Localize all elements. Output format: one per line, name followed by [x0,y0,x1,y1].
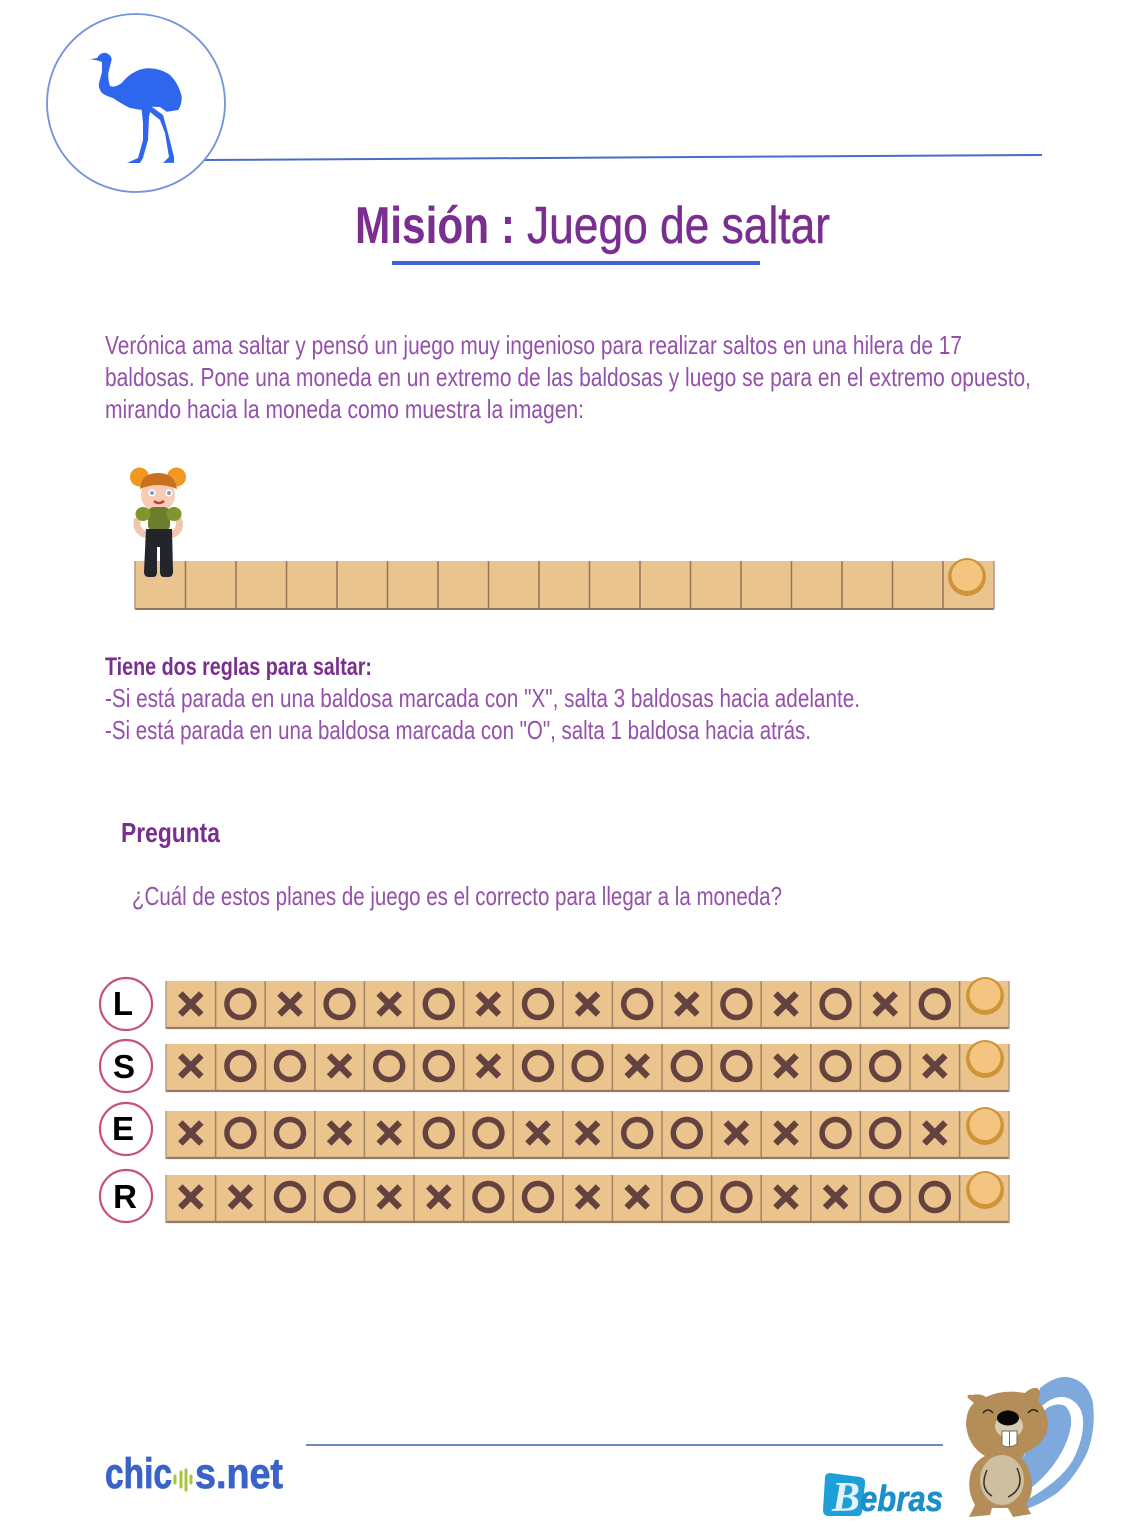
heading: question: Pregunta [121,817,220,848]
question text: ¿Cuál de estos planes de juego es el correcto para llegar a la moneda? [132,881,782,911]
option R: R [113,1178,137,1215]
icon: ostrich badge [47,14,225,192]
option L: L [113,985,133,1022]
logo: Bebras: B [831,1475,860,1521]
logo: chicos.net: chic [105,1450,172,1498]
text block: introduction [105,330,1031,424]
beaver body [966,1388,1048,1517]
header rule [205,155,1042,160]
logo: chicos.net [105,1450,283,1498]
option L [100,977,1009,1030]
text block: rules: -Si está parada en una baldosa marcada con "O", salta 1 baldosa hacia atrás. [105,715,811,745]
title: Juego de saltar [527,197,830,255]
text block: rules: -Si está parada en una baldosa marcada con "X", salta 3 baldosas hacia adelante. [105,683,860,713]
icon: beaver mascot [966,1377,1094,1517]
beaver face [983,1410,1038,1413]
option E [100,1103,1009,1159]
icon: girl character [130,468,186,577]
option S [100,1040,1009,1092]
text block: rules: Tiene dos reglas para saltar: [105,653,372,681]
title [355,197,830,255]
text block: introduction: mirando hacia la moneda como muestra la imagen: [105,394,584,424]
logo: Bebras: ebras [860,1478,943,1519]
title: Misión : [355,197,515,255]
title underline [392,261,760,265]
icon: coin [948,558,986,596]
logo: Bebras [823,1473,943,1521]
footer rule [306,1444,943,1446]
beaver tail [1010,1377,1094,1510]
option E: E [112,1110,134,1147]
option R [100,1170,1009,1223]
tile strip with coin [135,558,994,610]
option S: S [113,1048,135,1085]
text block: rules [105,653,860,745]
logo: chicos.net: s.net [195,1450,283,1498]
